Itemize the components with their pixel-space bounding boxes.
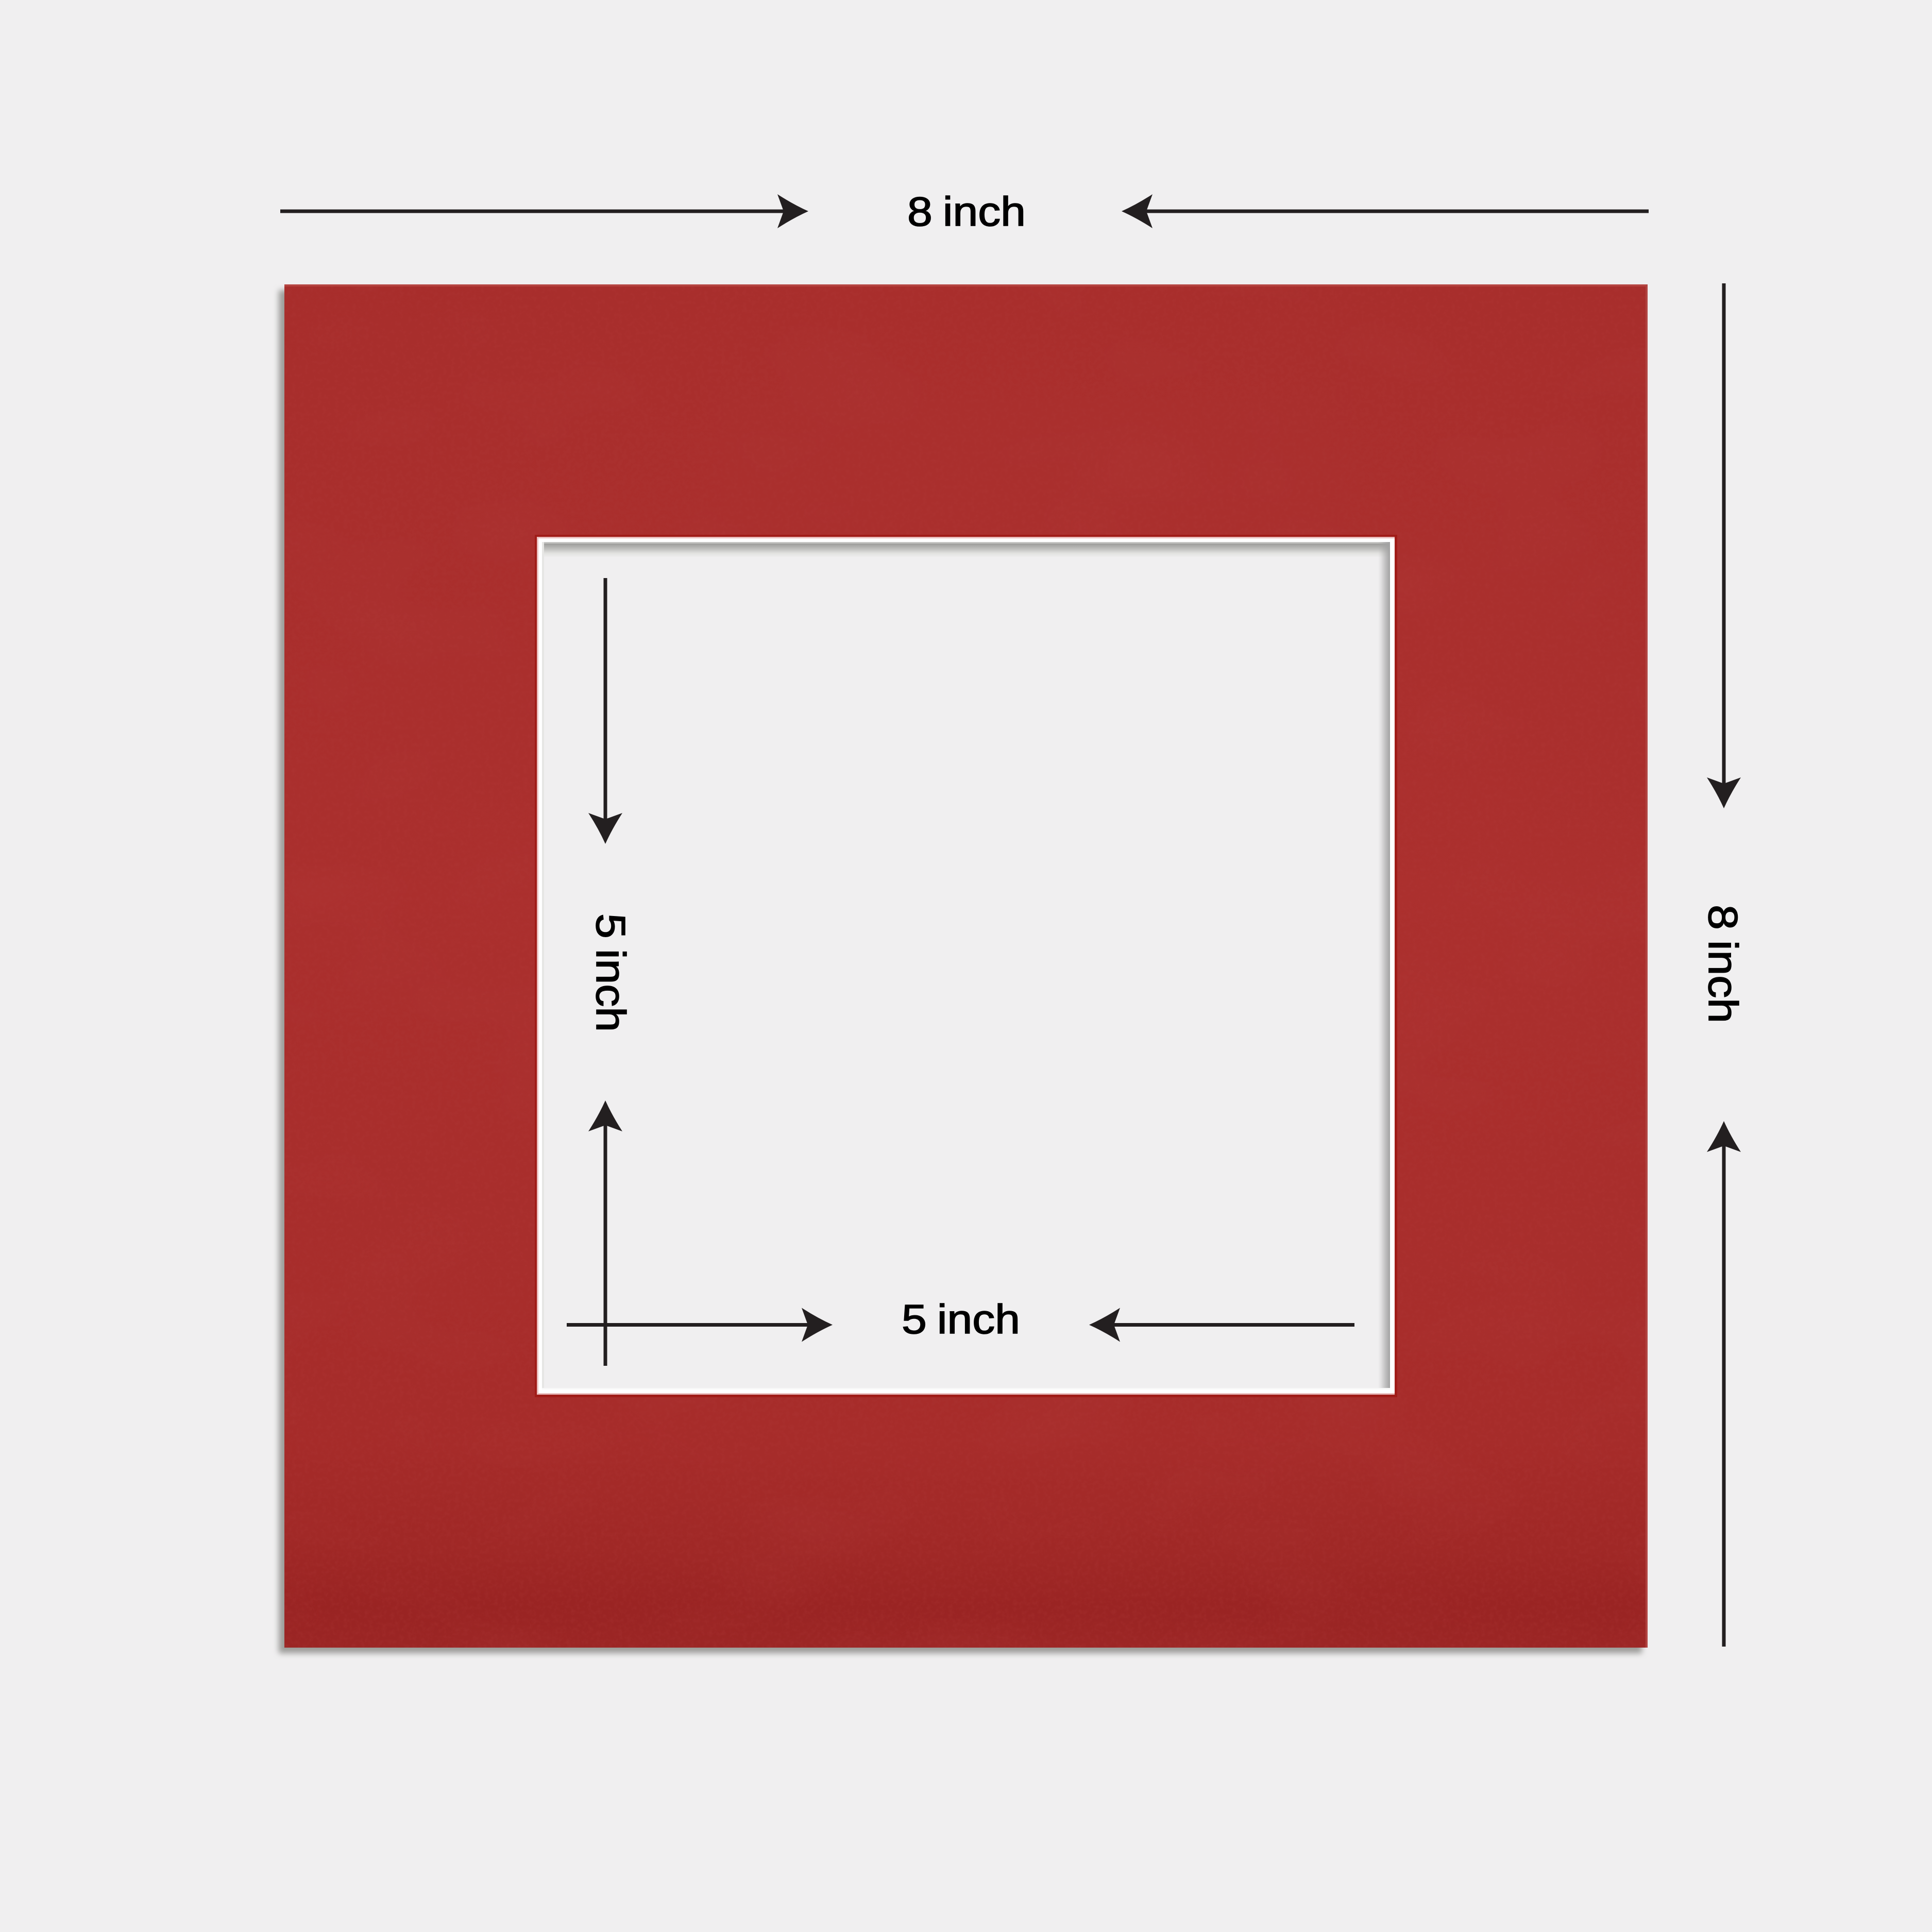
dimension: inner left 5 inch <box>588 578 634 1366</box>
arrow: top left pointing right <box>280 194 808 228</box>
arrow: inner left upper pointing down <box>588 578 622 844</box>
panel: red mat board with window <box>279 284 1648 1653</box>
label: 8 inch rotated: 8 inch <box>1700 905 1746 1023</box>
dimension: right 8 inch <box>1700 283 1746 1647</box>
arrow: inner left lower pointing up <box>588 1100 622 1366</box>
label: 5 inch: 5 inch <box>902 1296 1020 1342</box>
mat drop shadow <box>279 290 1642 1653</box>
dimension: top 8 inch <box>280 189 1649 234</box>
arrow: inner bottom left pointing right <box>567 1308 833 1342</box>
arrow: top right pointing left <box>1122 194 1649 228</box>
arrow: right lower pointing up <box>1707 1121 1741 1647</box>
dimension: inner bottom 5 inch <box>567 1296 1354 1342</box>
mat board <box>284 284 1648 1648</box>
label: 8 inch: 8 inch <box>907 189 1026 234</box>
label: 5 inch rotated: 5 inch <box>588 913 634 1032</box>
arrow: right upper pointing down <box>1707 283 1741 808</box>
window opening <box>535 535 1397 1397</box>
arrow: inner bottom right pointing left <box>1089 1308 1354 1342</box>
